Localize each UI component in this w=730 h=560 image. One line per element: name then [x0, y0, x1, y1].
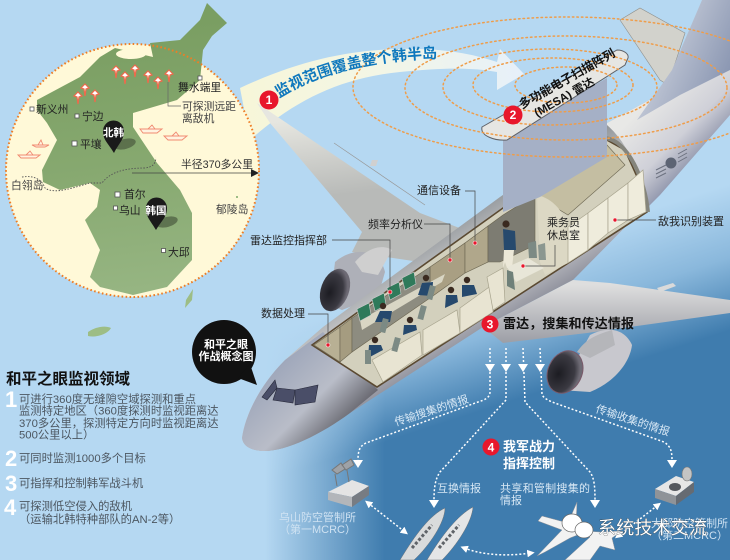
cabin callouts: 频率分析仪 — [368, 217, 423, 231]
list body text: 370多公里，探测特定方向时监视距离达 — [19, 416, 219, 430]
map labels: 大邱 — [168, 245, 190, 259]
map labels: 离敌机 — [182, 111, 215, 125]
flow labels — [393, 392, 672, 507]
list numerals: 3 — [5, 471, 17, 496]
standing crew member — [502, 220, 516, 268]
background sky glow on the left — [0, 300, 385, 560]
pin: 北韩: 北韩 — [103, 126, 124, 139]
far engine — [314, 247, 392, 315]
left control station — [328, 459, 369, 507]
cockpit windows — [262, 380, 318, 405]
cabin callouts: 雷达监控指挥部 — [250, 233, 327, 247]
badge 4 and step label: 4 — [488, 440, 495, 454]
crew rest bulkhead — [537, 195, 568, 275]
list body text — [19, 392, 219, 526]
right station label: （第二MCRC） — [651, 528, 728, 542]
cabin cutaway — [312, 138, 648, 387]
flow labels: 传输搜集的情报 — [393, 392, 470, 429]
speech bubble: concept diagram tag — [192, 320, 257, 385]
pin: 北韩 — [103, 120, 137, 153]
list body text: 可进行360度无缝隙空域探测和重点 — [19, 392, 196, 406]
cabin callouts: 休息室 — [547, 228, 580, 242]
rear cut ring — [605, 138, 648, 212]
badge 1 and coverage label: 监视范围覆盖整个韩半岛 — [274, 46, 436, 98]
horizontal stabilizer — [620, 8, 685, 85]
badge 2 and radar label: 多功能电子扫描阵列 — [516, 45, 617, 112]
enemy ship icons — [18, 125, 187, 158]
far wing — [257, 103, 470, 262]
map labels: 平壤 — [80, 137, 102, 151]
badge 1 and coverage label: 1 — [266, 93, 273, 107]
islands — [88, 196, 238, 337]
radar emission rings — [353, 17, 730, 157]
pin: 韩国: 韩国 — [146, 204, 166, 217]
leader line to long-range note — [168, 82, 181, 106]
rear cream panels — [568, 170, 646, 263]
badge 4 and step label: 指挥控制 — [503, 456, 555, 471]
cabin callouts: 通信设备 — [417, 183, 461, 197]
seats — [365, 285, 436, 364]
map labels: 乌山 — [119, 203, 141, 217]
consoles — [357, 272, 445, 330]
map labels: 白翎岛 — [11, 178, 43, 192]
pin: 韩国 — [146, 198, 179, 230]
cabin callouts: 数据处理 — [261, 306, 305, 320]
warships — [400, 507, 473, 560]
list body text: （运输北韩特种部队的AN-2等） — [19, 512, 180, 526]
list body text: 500公里以上） — [19, 428, 94, 442]
flow labels: 互换情报 — [437, 481, 481, 495]
list numerals: 2 — [5, 446, 17, 471]
seated operators — [368, 275, 477, 358]
front partitions — [372, 268, 505, 382]
map labels: 舞水端里 — [178, 81, 221, 94]
speech bubble: concept diagram tag: 作战概念图 — [198, 349, 254, 363]
cabin callouts — [250, 183, 724, 347]
list heading: 和平之眼监视领域 — [6, 369, 131, 388]
cabin callouts: 敌我识别装置 — [658, 214, 724, 228]
near engine — [540, 330, 632, 399]
right station label — [651, 516, 728, 542]
back wall panels — [314, 145, 625, 362]
flow labels: 传输收集的情报 — [594, 402, 672, 439]
tail markings — [656, 149, 687, 178]
badge 2 and radar label: 2 — [510, 108, 517, 122]
left station label: 乌山防空管制所 — [279, 510, 356, 524]
right control station — [655, 467, 694, 505]
Korean peninsula — [37, 3, 227, 295]
fighter jets — [537, 502, 622, 560]
list body text: 可指挥和控制韩军战斗机 — [19, 476, 144, 490]
left station label — [279, 510, 356, 536]
cabin callouts: 乘务员 — [547, 216, 580, 229]
radar support pylon — [503, 78, 607, 212]
dashed data-flow arrows — [358, 348, 672, 555]
crew table and seats — [507, 241, 546, 290]
cold lake patch — [116, 49, 146, 59]
radius line — [132, 169, 259, 177]
list body text: 可同时监测1000多个目标 — [19, 451, 146, 465]
tail fin — [637, 0, 730, 120]
map labels — [11, 81, 253, 259]
flow labels: 情报 — [500, 493, 522, 507]
left station label: （第一MCRC） — [279, 522, 356, 536]
watermark: 系统技术交流 — [598, 518, 707, 538]
map labels: 可探测远距 — [182, 100, 236, 113]
map labels: 郁陵岛 — [216, 202, 248, 216]
map circle — [6, 3, 259, 337]
list body text: 监测特定地区（360度探测时监视距离达 — [19, 404, 219, 418]
badge 4 and step label — [482, 438, 555, 471]
badge 3 and step label: 雷达，搜集和传达情报 — [503, 316, 634, 331]
list numerals — [4, 387, 17, 520]
map labels: 新义州 — [36, 102, 68, 116]
map labels: 半径370多公里 — [181, 157, 253, 171]
radar dome — [482, 50, 628, 140]
range border — [6, 44, 259, 297]
fuselage — [242, 57, 730, 451]
map labels: 宁边 — [82, 109, 104, 123]
flow labels: 共享和管制搜集的 — [500, 481, 590, 495]
panel: surveillance area list — [4, 369, 219, 526]
list numerals: 1 — [5, 387, 17, 412]
city markers — [30, 76, 202, 252]
map labels: 首尔 — [124, 188, 146, 201]
badge 4 and step label: 我军战力 — [503, 439, 555, 454]
demarcation line — [22, 158, 156, 191]
watermark — [562, 514, 707, 538]
list numerals: 4 — [4, 495, 17, 520]
badge 2 and radar label: (MESA) 雷达 — [532, 74, 597, 120]
speech bubble: concept diagram tag: 和平之眼 — [204, 337, 248, 351]
badge 3 and step label: 3 — [487, 318, 494, 332]
arrowheads — [353, 364, 677, 508]
near wing — [483, 280, 730, 343]
right station label: 大邱防空管制所 — [651, 516, 728, 530]
enemy aircraft icons — [74, 65, 173, 104]
arrow: coverage beam — [240, 49, 524, 140]
list body text: 可探测低空侵入的敌机 — [19, 499, 133, 513]
